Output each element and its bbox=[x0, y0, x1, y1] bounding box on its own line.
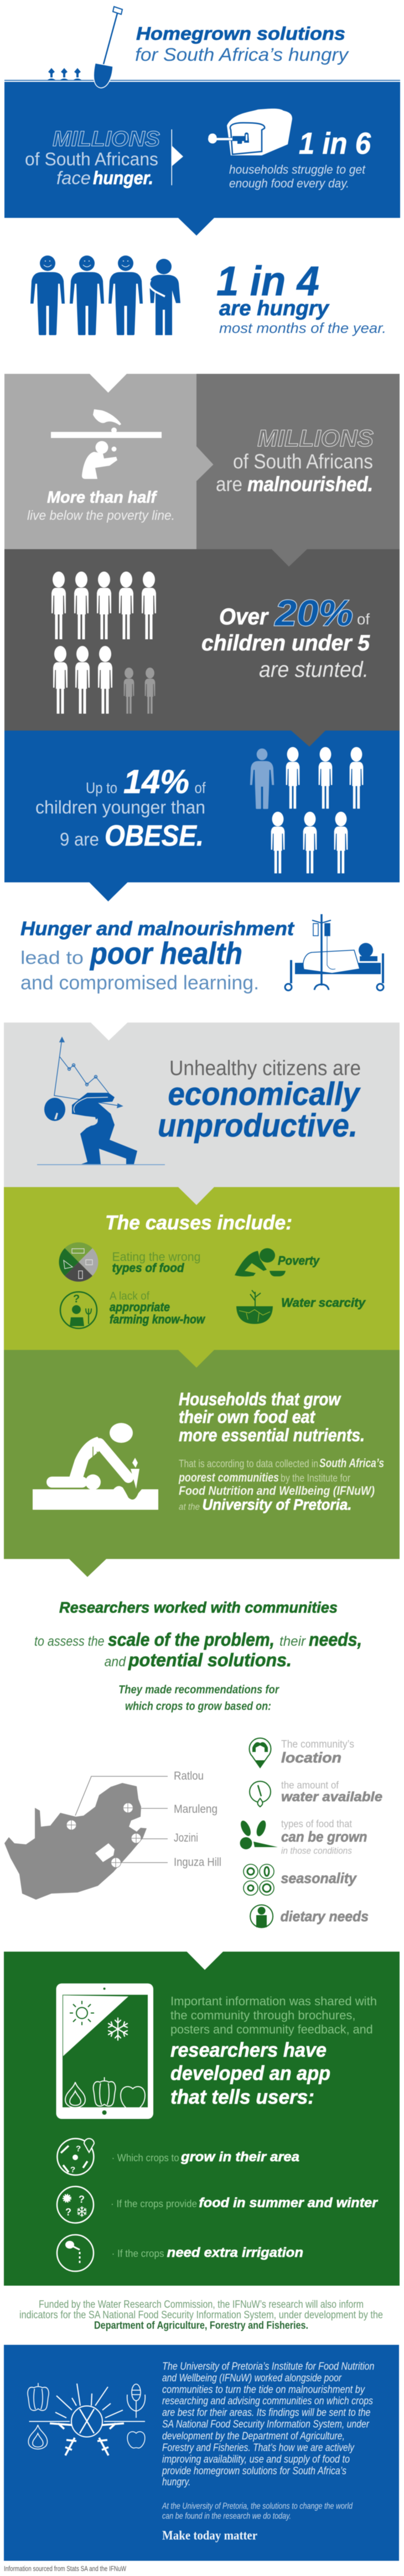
text: households struggle: households struggle to get bbox=[229, 163, 366, 176]
text: University of Pretoria description: hungry. bbox=[162, 2476, 190, 2488]
text: households heading: their own food eat bbox=[179, 1407, 315, 1427]
icon: sun and snowflake with cutlery bbox=[28, 2383, 145, 2455]
text: face hunger bbox=[56, 168, 153, 188]
text: need extra irrigation: need extra irrigation bbox=[167, 2245, 303, 2260]
text: face hunger: hunger. bbox=[93, 168, 153, 188]
text: food in summer and winter: food in summer and winter bbox=[199, 2196, 379, 2210]
section: researchers worked with communities bbox=[34, 1599, 362, 1713]
text: Up to 14% of: of bbox=[195, 779, 206, 796]
text: researchers have developed an app: researchers have bbox=[170, 2038, 327, 2061]
text: amount of water: water available bbox=[281, 1790, 382, 1805]
text: lack of farming know-how bbox=[110, 1290, 206, 1326]
text: Over 20% of bbox=[219, 592, 370, 633]
text: to assess the scale bbox=[34, 1629, 362, 1650]
text: solutions to change the world: At the University of Pretoria, the solutions to change the world bbox=[162, 2502, 353, 2511]
text: households heading bbox=[179, 1389, 365, 1445]
icon: tablet bbox=[56, 1983, 153, 2119]
text: children younger than: children younger than bbox=[35, 797, 205, 817]
text: grow in their area bbox=[112, 2150, 299, 2165]
text: of South Africans: of South Africans bbox=[25, 149, 158, 169]
panel: the causes bbox=[4, 1187, 400, 1350]
section: poor health bbox=[20, 914, 384, 994]
text: researchers have developed an app: that tells users: bbox=[170, 2085, 314, 2108]
icon: farmer with question: ? bbox=[73, 1293, 80, 1305]
map labels: Jozini bbox=[174, 1832, 198, 1844]
text: are stunted: are stunted. bbox=[259, 658, 369, 682]
icon: snowflake bbox=[108, 2018, 127, 2040]
text: recommendations: which crops to grow based on: bbox=[125, 1700, 271, 1713]
text: to assess the scale: scale of the problem, bbox=[108, 1629, 274, 1650]
subtitle: for South Africa's hungry: for South Africa’s hungry bbox=[135, 44, 350, 65]
text: funding statement bbox=[19, 2299, 383, 2332]
text: source of data bbox=[178, 1456, 384, 1513]
text: source of data: Food Nutrition and Wellbeing (IFNuW) bbox=[179, 1484, 375, 1498]
list: recommendation criteria bbox=[239, 1738, 382, 1928]
text: face hunger: face bbox=[56, 168, 91, 188]
text: types of food: in those conditions bbox=[281, 1845, 352, 1856]
text: most months of the year: most months of the year. bbox=[219, 320, 386, 336]
icon: hungry person bbox=[149, 259, 180, 335]
text: Make today matter: Make today matter bbox=[162, 2528, 257, 2542]
text: households heading: more essential nutrients. bbox=[179, 1425, 365, 1445]
icon: irrigation bbox=[57, 2235, 94, 2271]
text: Researchers worked with communities: Researchers worked with communities bbox=[59, 1599, 338, 1616]
icon: sun bbox=[70, 2001, 94, 2025]
icon: crops in area: ? bbox=[76, 2144, 81, 2153]
panel: economically unproductive bbox=[4, 1023, 400, 1187]
text: Water scarcity: Water scarcity bbox=[281, 1296, 366, 1310]
text: community's location bbox=[281, 1739, 354, 1766]
icon: farmer with question bbox=[60, 1292, 97, 1328]
icon: row of children bbox=[51, 572, 156, 713]
text: University of Pretoria description: improving availability, use and supply of food to bbox=[162, 2454, 350, 2465]
text: need extra irrigation bbox=[112, 2245, 303, 2260]
icon: onion bbox=[65, 2082, 85, 2108]
panel: the app bbox=[4, 1952, 400, 2286]
panel: millions face hunger bbox=[4, 63, 400, 236]
icon: other children bbox=[271, 747, 363, 873]
text: lead to poor health: poor health bbox=[89, 936, 242, 971]
text: need extra irrigation: · If the crops bbox=[112, 2248, 164, 2259]
text: information shared: posters and community feedback, and bbox=[170, 2022, 373, 2036]
text: households struggle: enough food every day. bbox=[229, 176, 349, 190]
text: Over 20% of: of bbox=[357, 611, 370, 628]
text: source of data: at the bbox=[179, 1501, 200, 1512]
panel: obese children bbox=[4, 731, 400, 901]
icon: summer and winter: ? bbox=[65, 2207, 71, 2218]
icon: apple bbox=[121, 2087, 145, 2109]
icon: graph on man's back bbox=[54, 1037, 122, 1108]
text: eating the wrong types of food bbox=[112, 1250, 200, 1275]
icon: obese child bbox=[250, 748, 274, 809]
icon: hand dropping coin over poverty line bbox=[51, 409, 162, 479]
icon: corn bbox=[127, 2384, 145, 2418]
text: seasonality: seasonality bbox=[281, 1870, 357, 1886]
icon: shovel bbox=[103, 7, 122, 64]
text: 9 are OBESE bbox=[60, 820, 204, 852]
icon: water gauge bbox=[250, 1781, 271, 1807]
map labels: Inguza Hill bbox=[174, 1856, 221, 1869]
text: recommendations bbox=[118, 1683, 280, 1713]
icon: dietary needs person bbox=[250, 1905, 273, 1928]
text: University of Pretoria description: provide homegrown solutions for South Africa’s bbox=[162, 2465, 346, 2477]
icon: onion bbox=[28, 2425, 48, 2449]
stat: 1 in 4: 1 in 4 bbox=[216, 258, 319, 304]
text: lack of farming know-how: A lack of bbox=[110, 1290, 149, 1302]
icon: person planting bbox=[33, 1423, 158, 1510]
text: University of Pretoria description: SA National Food Security Information System, under bbox=[162, 2419, 370, 2430]
text: food in summer and winter bbox=[111, 2196, 379, 2210]
text: to assess the scale: their bbox=[279, 1634, 307, 1649]
text: information shared: the community through brochures, bbox=[170, 2009, 355, 2022]
divider arrow bbox=[172, 129, 183, 185]
text: lack of farming know-how: farming know-how bbox=[110, 1312, 206, 1326]
text: to assess the scale: to assess the bbox=[34, 1634, 105, 1649]
text: are malnourished: malnourished. bbox=[247, 473, 373, 496]
icon: crops in area: ? bbox=[70, 2165, 75, 2175]
icon: man bent under the burden bbox=[37, 1093, 165, 1165]
icon: three well-fed people bbox=[30, 255, 143, 335]
text: lead to poor health: lead to bbox=[20, 947, 84, 968]
text: households heading: Households that grow bbox=[179, 1389, 341, 1409]
map pins bbox=[66, 1803, 141, 1868]
icon: four seasons bbox=[244, 1864, 274, 1895]
text: researchers have developed an app bbox=[170, 2038, 330, 2108]
panel: University of Pretoria closing bbox=[4, 2345, 399, 2561]
map labels: Maruleng bbox=[174, 1803, 217, 1816]
text: types of food: can be grown bbox=[281, 1828, 367, 1845]
icon: crops in area bbox=[57, 2139, 94, 2175]
text: eating the wrong types of food: Eating the wrong bbox=[112, 1250, 200, 1264]
text: unproductive: unproductive. bbox=[158, 1108, 358, 1144]
stat: 1 in 6: 1 in 6 bbox=[299, 126, 371, 160]
text: source of data: University of Pretoria. bbox=[203, 1496, 352, 1513]
text: researchers have developed an app: developed an app bbox=[170, 2062, 330, 2084]
text: and potential solutions: potential solutions. bbox=[128, 1650, 292, 1670]
text: live below the poverty line: live below the poverty line. bbox=[27, 508, 175, 523]
text: source of data: That is according to data collected in bbox=[179, 1458, 318, 1470]
icon: apple bbox=[127, 2432, 145, 2448]
text: recommendations: They made recommendations for bbox=[118, 1683, 280, 1696]
text: 9 are OBESE: 9 are bbox=[60, 829, 99, 849]
panel: millions malnourished bbox=[196, 374, 400, 549]
title: Homegrown solutions: Homegrown solutions bbox=[136, 23, 345, 44]
text: Poverty: Poverty bbox=[278, 1254, 320, 1268]
text: source of data: South Africa’s bbox=[319, 1456, 384, 1470]
text: University of Pretoria description: communities to turn the tide on malnourishment by bbox=[162, 2384, 365, 2396]
text: households struggle bbox=[229, 163, 366, 190]
text: of South Africans: of South Africans bbox=[233, 450, 373, 473]
icon: shovel blade bbox=[94, 63, 113, 88]
icon: locked bread bbox=[208, 108, 292, 155]
map labels bbox=[174, 1770, 221, 1869]
text: to assess the scale: needs, bbox=[309, 1629, 362, 1650]
text: types of food: types of food that bbox=[281, 1818, 352, 1829]
icon: summer and winter: ? bbox=[79, 2194, 85, 2205]
text: and compromised learning: and compromised learning. bbox=[20, 971, 259, 994]
icon: pepper bbox=[28, 2383, 49, 2411]
text: community's location: location bbox=[281, 1749, 341, 1766]
text: Up to 14% of: Up to bbox=[86, 779, 117, 796]
text: University of Pretoria description: are best for their areas. Its findings will be sent to the bbox=[162, 2407, 371, 2419]
section: 1 in 4 are hungry bbox=[30, 255, 386, 336]
text: source of data: poorest communities bbox=[178, 1470, 279, 1484]
text: are hungry: are hungry bbox=[219, 297, 330, 320]
text: Hunger and malnourishment: Hunger and malnourishment bbox=[20, 918, 294, 940]
text: food in summer and winter: · If the crops provide bbox=[111, 2198, 197, 2209]
text: amount of water: the amount of bbox=[281, 1780, 339, 1791]
icon: food pie bbox=[59, 1242, 99, 1282]
text: University of Pretoria description: Forestry and Fisheries. That’s how we are actively bbox=[162, 2442, 355, 2454]
text: are malnourished: are bbox=[216, 473, 242, 496]
text: source note: Information sourced from Stats SA and the IFNuW bbox=[4, 2564, 127, 2573]
panel: stunted children bbox=[4, 549, 400, 731]
text: types of food bbox=[281, 1818, 367, 1856]
map labels: Ratlou bbox=[174, 1770, 204, 1782]
text: grow in their area: grow in their area bbox=[180, 2150, 299, 2165]
text: funding statement: Department of Agriculture, Forestry and Fisheries. bbox=[94, 2320, 308, 2332]
text: solutions to change the world bbox=[162, 2502, 353, 2521]
map: South Africa bbox=[4, 1770, 221, 1900]
text: MILLIONS outlined: MILLIONS bbox=[53, 127, 160, 151]
text: lead to poor health bbox=[20, 936, 242, 971]
text: Over 20% of: Over bbox=[219, 603, 269, 629]
text: source of data: by the Institute for bbox=[281, 1473, 351, 1484]
text: children under 5: children under 5 bbox=[201, 631, 370, 655]
section: title header bbox=[46, 7, 350, 81]
panel: more than half below poverty line bbox=[4, 374, 196, 549]
text: Over 20% of: 20% bbox=[274, 592, 353, 633]
text: Up to 14% of: 14% bbox=[123, 763, 189, 800]
icon: hospital bed with drip bbox=[285, 914, 384, 990]
text: lack of farming know-how: appropriate bbox=[110, 1300, 170, 1314]
text: information shared bbox=[170, 1994, 377, 2036]
text: University of Pretoria description bbox=[162, 2361, 374, 2488]
leader lines bbox=[75, 1776, 168, 1863]
icon: cracked soil with plant bbox=[236, 1290, 273, 1324]
icon: crouching poor person bbox=[235, 1248, 286, 1276]
text: University of Pretoria description: and Wellbeing (IFNuW) worked alongside poor bbox=[162, 2372, 342, 2384]
text: grow in their area: · Which crops to bbox=[112, 2152, 179, 2163]
icon: three sprouts bbox=[46, 68, 82, 81]
icon: summer and winter bbox=[57, 2187, 94, 2223]
text: eating the wrong types of food: types of food bbox=[112, 1261, 184, 1275]
text: and potential solutions: and bbox=[105, 1654, 126, 1670]
panel: households growing food bbox=[4, 1350, 400, 1577]
text: community's location: The community’s bbox=[281, 1739, 354, 1750]
text: Up to 14% of bbox=[86, 763, 206, 800]
text: University of Pretoria description: development by the Department of Agriculture, bbox=[162, 2431, 345, 2442]
icon: stunted children bbox=[124, 668, 155, 713]
icon: food crops bbox=[239, 1819, 278, 1849]
text: dietary needs: dietary needs bbox=[281, 1908, 369, 1925]
text: Unhealthy citizens are: Unhealthy citizens are bbox=[169, 1057, 361, 1080]
text: solutions to change the world: can be found in the research we do today. bbox=[162, 2512, 291, 2521]
text: economically: economically bbox=[168, 1076, 361, 1112]
text: amount of water bbox=[281, 1780, 382, 1805]
text: MILLIONS outlined: MILLIONS bbox=[257, 425, 374, 452]
text: information shared: Important information was shared with bbox=[170, 1994, 377, 2008]
text: 9 are OBESE: OBESE. bbox=[105, 820, 204, 852]
icon: pepper bbox=[94, 2077, 116, 2106]
text: More than half: More than half bbox=[47, 488, 158, 507]
icon: location pin bbox=[249, 1738, 271, 1767]
heading: The causes include: The causes include: bbox=[105, 1211, 292, 1234]
